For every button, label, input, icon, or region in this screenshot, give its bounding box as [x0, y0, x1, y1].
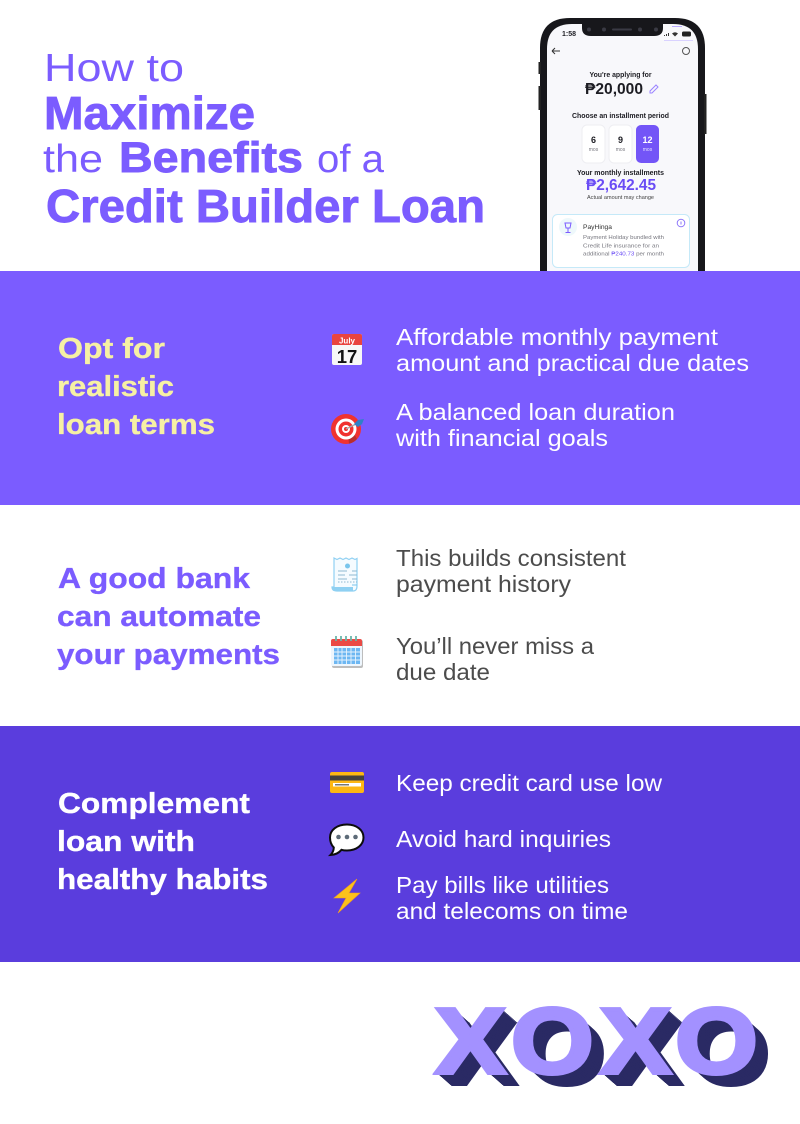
phone mockup: Payment Holiday bundled with — [583, 235, 664, 241]
title: Maximize — [44, 87, 255, 139]
panel: realistic loan terms — [0, 271, 800, 505]
icon: wall calendar — [331, 636, 363, 668]
heading: complement loan with healthy habits: Complement — [58, 788, 251, 820]
icon: calendar july 17: July — [339, 336, 356, 346]
text: balanced loan duration: A balanced loan duration — [396, 399, 675, 425]
text: never miss a due date: You’ll never miss a — [396, 633, 594, 659]
phone mockup: 12 — [642, 135, 653, 145]
icon: receipt — [332, 558, 357, 591]
phone mockup: mos — [643, 147, 653, 153]
heading: a good bank can automate your payments: can automate — [57, 601, 261, 633]
text: affordable monthly payment: Affordable monthly payment — [396, 324, 719, 350]
icon: credit card — [330, 772, 364, 793]
title: How to — [44, 47, 184, 90]
phone mockup: Your monthly installments — [577, 168, 664, 177]
phone mockup — [538, 18, 706, 275]
text: balanced loan duration: with financial goals — [395, 425, 608, 451]
phone mockup: 1:58 — [562, 31, 576, 38]
text: affordable monthly payment: amount and practical due dates — [396, 350, 749, 376]
panel: healthy habits — [0, 726, 800, 962]
icon: target with dart — [331, 414, 364, 444]
phone mockup: mos — [589, 147, 599, 153]
title — [43, 47, 485, 232]
text: never miss a due date: due date — [396, 659, 490, 685]
phone mockup: Actual amount may change — [587, 195, 654, 201]
heading: a good bank can automate your payments: your payments — [57, 639, 280, 671]
title: Benefits — [119, 134, 303, 182]
text: keep credit card use low: Keep credit card use low — [396, 770, 663, 796]
icon: calendar july 17: 17 — [337, 346, 357, 367]
heading: opt for realistic loan terms: loan terms — [57, 409, 215, 441]
heading: a good bank can automate your payments — [57, 563, 280, 671]
text: pay bills on time: Pay bills like utilities — [396, 872, 609, 898]
text: consistent payment history: This builds consistent — [396, 545, 627, 571]
phone mockup: ₱2,642.45 — [586, 177, 656, 194]
text: pay bills on time — [396, 872, 628, 924]
heading: opt for realistic loan terms: Opt for — [58, 333, 165, 365]
icon: lightning bolt — [334, 879, 360, 913]
title: of a — [317, 138, 384, 181]
text: affordable monthly payment — [396, 324, 749, 376]
panel: automate payments — [0, 505, 800, 726]
phone mockup: 9 — [618, 135, 623, 145]
heading: a good bank can automate your payments: A good bank — [58, 563, 250, 595]
phone mockup: Choose an installment period — [572, 111, 669, 120]
phone mockup: 6 — [591, 135, 596, 145]
icon: calendar july 17 — [332, 334, 362, 367]
text: balanced loan duration — [395, 399, 675, 451]
text: avoid hard inquiries: Avoid hard inquiries — [396, 826, 611, 852]
title: the — [43, 138, 103, 181]
heading: complement loan with healthy habits: healthy habits — [57, 864, 268, 896]
heading: complement loan with healthy habits — [57, 788, 268, 896]
phone mockup: ₱20,000 — [585, 81, 643, 98]
text: consistent payment history — [396, 545, 627, 597]
title: Credit Builder Loan — [46, 180, 485, 232]
text: consistent payment history: payment history — [396, 571, 572, 597]
phone mockup: mos — [616, 147, 626, 153]
text: pay bills on time: and telecoms on time — [396, 898, 628, 924]
phone mockup: Credit Life insurance for an — [583, 244, 659, 250]
phone mockup: You're applying for — [590, 70, 652, 79]
phone mockup: additional ₱240.73 per month — [583, 252, 664, 258]
heading: opt for realistic loan terms — [57, 333, 215, 441]
text: never miss a due date — [396, 633, 594, 685]
heading: complement loan with healthy habits: loan with — [57, 826, 195, 858]
heading: opt for realistic loan terms: realistic — [57, 371, 174, 403]
logo: XOXO: XOXO — [435, 989, 758, 1093]
phone mockup: PayHinga — [583, 224, 612, 231]
icon: speech bubble — [330, 824, 364, 855]
